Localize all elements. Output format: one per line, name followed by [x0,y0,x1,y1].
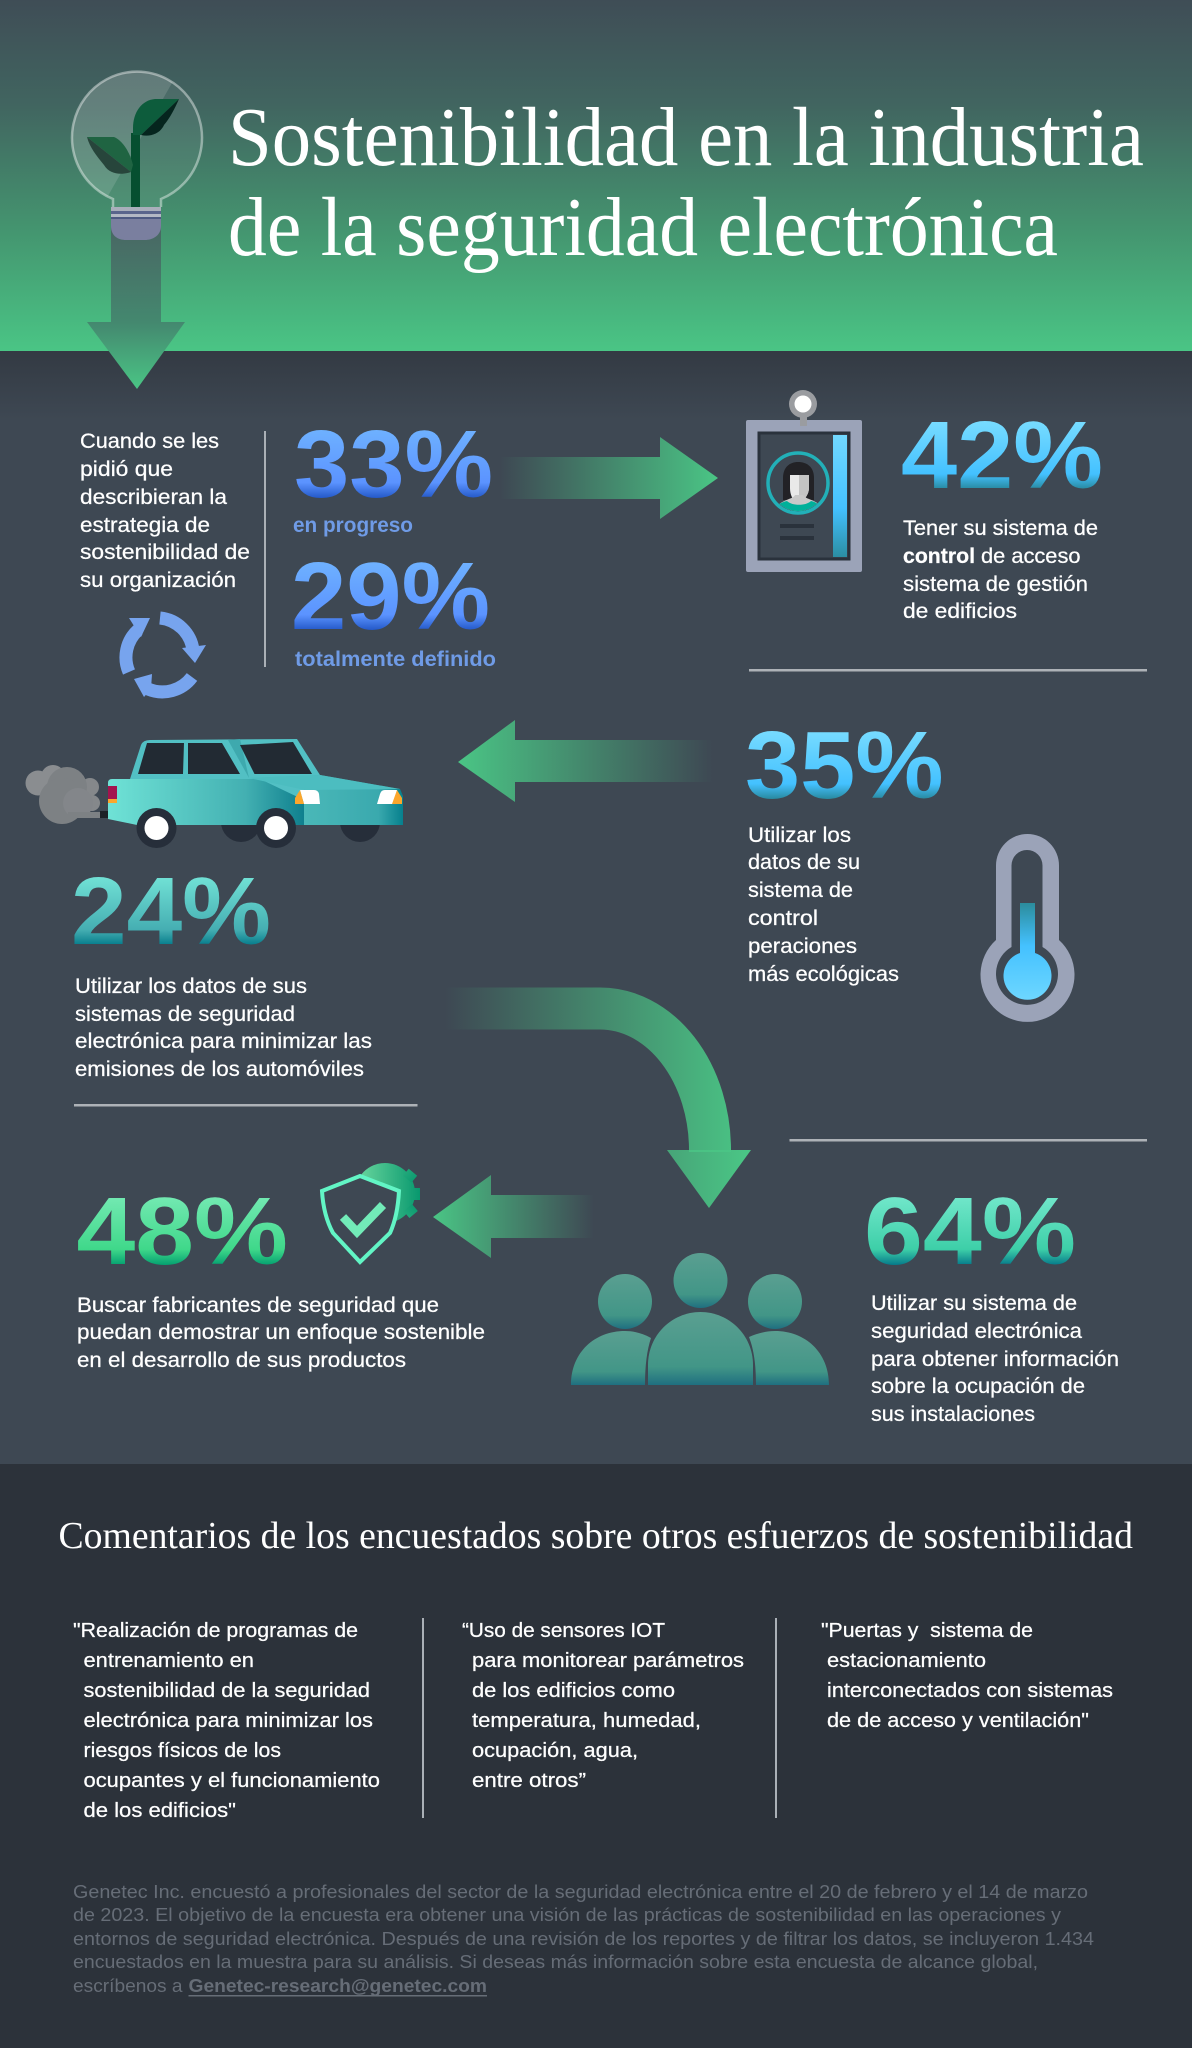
panel: header band [0,0,1192,351]
icon: group of people [571,1253,829,1385]
arrow: from lightbulb down [87,225,185,389]
quote: IoT sensors: ocupación, agua, [472,1740,638,1762]
arrow: right to badge [500,437,718,519]
text: 64% description: sus instalaciones [871,1403,1035,1426]
heading: comments: Comentarios de los encuestados sobre otros esfuerzos de sostenibilidad [58,1515,1133,1557]
text: 35% description: datos de su [748,851,860,874]
text: 24% description: sistemas de seguridad [75,1003,295,1026]
text: 35% description: Utilizar los [748,824,851,847]
text: survey footnote: encuestados en la muestra para su análisis. Si deseas más información sobre esta encuesta de alcance global, [73,1952,1038,1972]
text: 64% description [871,1292,1119,1426]
text: 24% description: Utilizar los datos de sus [75,975,307,998]
stat: 64%: 64% [864,1178,1076,1285]
title: de la seguridad electrónica [228,181,1058,274]
stat: 48%: 48% [76,1178,288,1285]
text: 64% description: seguridad electrónica [871,1320,1082,1343]
text: survey footnote: entornos de seguridad electrónica. Después de una revisión de los reportes y de filtrar los datos, se incluyeron 1.434 [73,1929,1094,1949]
text: 64% description: sobre la ocupación de [871,1375,1085,1398]
stat: 29% totalmente definido: totalmente definido [295,648,496,671]
icon: access badge [746,390,862,572]
text: strategy intro: estrategia de [80,514,210,537]
quote: IoT sensors: para monitorear parámetros [472,1650,744,1672]
arrow: left to car [458,720,713,802]
icon: recycle arrows [126,618,206,697]
quote: training programs: sostenibilidad de la seguridad [84,1680,370,1702]
stat: 35%: 35% [745,712,944,819]
text: 35% description: peraciones [748,935,857,958]
quote: IoT sensors [462,1620,744,1792]
text: survey footnote: Genetec Inc. encuestó a profesionales del sector de la seguridad electrónica entre el 20 de febrero y el 14 de marzo [73,1882,1088,1902]
title [228,91,1144,274]
text: strategy intro: sostenibilidad de [80,541,250,564]
title: Sostenibilidad en la industria [228,91,1144,184]
text: 64% description: para obtener información [871,1348,1119,1371]
quote: training programs: de los edificios" [84,1800,236,1822]
quote: IoT sensors: “Uso de sensores IOT [462,1620,665,1642]
text: 64% description: Utilizar su sistema de [871,1292,1077,1315]
stat: 29% totalmente definido: 29% [291,543,490,650]
text: strategy intro: pidió que [80,458,173,481]
stat: 24%: 24% [71,858,271,965]
text: 48% description: puedan demostrar un enfoque sostenible [77,1321,485,1344]
text: 48% description: Buscar fabricantes de seguridad que [77,1294,439,1317]
stat: 33% en progreso: en progreso [293,514,413,537]
quote: training programs: "Realización de programas de [73,1620,358,1642]
text: 42% description: Tener su sistema de [903,517,1098,540]
quote: doors and parking: de de acceso y ventilación" [827,1710,1089,1732]
text: strategy intro: su organización [80,569,236,592]
text: 48% description: en el desarrollo de sus productos [77,1349,406,1372]
text: 35% description: sistema de [748,879,853,902]
text: 35% description [748,824,899,986]
text: strategy intro [80,430,250,592]
quote: doors and parking [821,1620,1113,1732]
quote: training programs [73,1620,380,1822]
text: 24% description: emisiones de los automóviles [75,1058,364,1081]
text: 42% description: control [903,545,975,568]
icon: shield with gear [322,1163,420,1262]
text: 24% description: electrónica para minimizar las [75,1030,372,1053]
quote: IoT sensors: temperatura, humedad, [472,1710,701,1732]
text: 42% description: de edificios [903,600,1017,623]
quote: doors and parking: estacionamiento [827,1650,986,1672]
arrow: left to shield [433,1175,594,1258]
quote: IoT sensors: de los edificios como [472,1680,675,1702]
quote: training programs: entrenamiento en [84,1650,254,1672]
text: survey footnote: de 2023. El objetivo de la encuesta era obtener una visión de las prácticas de sostenibilidad en las operaciones y [73,1905,1061,1925]
text: 42% description [903,517,1098,623]
text: strategy intro: describieran la [80,486,227,509]
panel: comments [0,1464,1192,2048]
text: survey footnote: escríbenos a [73,1976,184,1996]
quote: training programs: riesgos físicos de los [84,1740,281,1762]
quote: training programs: electrónica para minimizar los [84,1710,373,1732]
arrow: curved down to people [445,1008,751,1208]
text: 24% description [75,975,372,1081]
quote: training programs: ocupantes y el funcionamiento [84,1770,380,1792]
text: 48% description [77,1294,485,1372]
quote: doors and parking: interconectados con sistemas [827,1680,1113,1702]
icon: thermometer [980,834,1074,1022]
text: 42% description: sistema de gestión [903,573,1088,596]
text: 42% description: de acceso [981,545,1080,568]
text: survey footnote [73,1882,1094,1996]
stat: 33% en progreso: 33% [294,411,493,518]
text: survey footnote: Genetec-research@genetec.com [188,1976,487,1996]
icon: car with exhaust smoke [26,739,403,848]
quote: IoT sensors: entre otros” [472,1770,586,1792]
text: 35% description: control [748,907,818,930]
quote: doors and parking: "Puertas y sistema de [821,1620,1033,1642]
text: 35% description: más ecológicas [748,963,899,986]
text: strategy intro: Cuando se les [80,430,219,453]
page background [0,351,1192,1464]
icon: lightbulb with plant [70,70,204,240]
stat: 42%: 42% [901,402,1103,509]
